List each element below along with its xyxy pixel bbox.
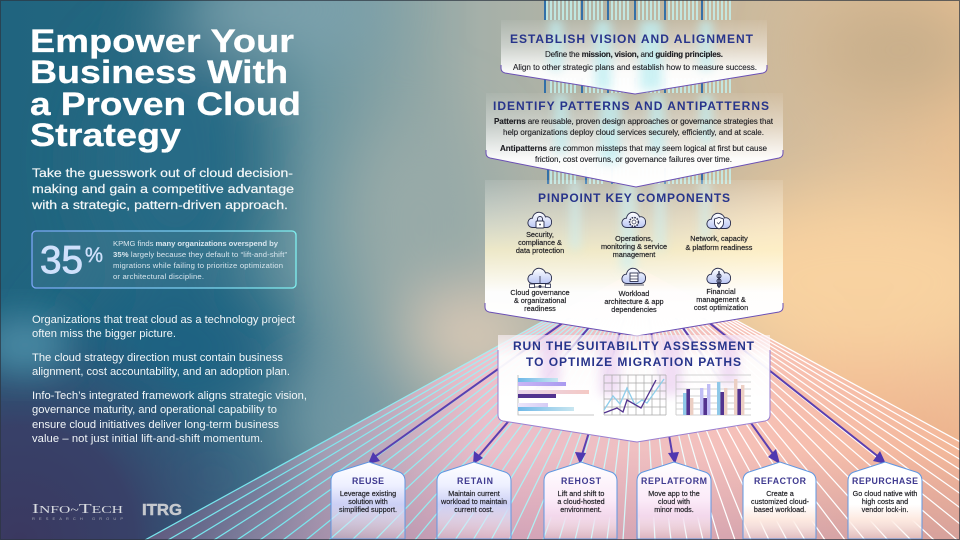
logo: Info-Tech Research Group: RESEARCH GROUP	[32, 516, 123, 521]
label: workload: dependencies	[611, 305, 657, 314]
text: antipatterns definition	[500, 144, 767, 164]
title: Business With	[30, 54, 288, 90]
chart: line chart on grid	[604, 375, 666, 415]
path card: retain: RETAIN	[457, 476, 493, 486]
label: financial	[694, 287, 748, 312]
title: Strategy	[30, 117, 181, 153]
icon: governance cloud	[528, 268, 552, 288]
arrows from assessment step to the six migration paths	[369, 324, 885, 463]
label: operations: Operations,	[615, 234, 653, 243]
label: security: Security,	[526, 230, 554, 239]
step 2: identify patterns and antipatterns	[486, 93, 783, 187]
subtitle: making and gain a competitive advantage	[32, 182, 294, 196]
subtitle: Take the guesswork out of cloud decision-	[32, 166, 293, 180]
path card: refactor	[743, 462, 816, 539]
path card: rehost: a cloud-hosted	[557, 497, 605, 506]
path card: rehost: Lift and shift to	[558, 489, 604, 498]
label: network: Network, capacity	[690, 234, 748, 243]
label: workload: architecture & app	[604, 297, 664, 306]
chart: horizontal bars	[518, 375, 594, 415]
label: network: & platform readiness	[686, 243, 753, 252]
label: governance	[510, 288, 570, 313]
big number: 35	[40, 239, 83, 282]
path card: retain: workload to maintain	[440, 497, 507, 506]
title: a Proven Cloud	[30, 86, 301, 122]
callout text: KPMG finds many organizations overspend by	[113, 239, 279, 248]
path card: repurchase: high costs and	[862, 497, 908, 506]
heading: suitability assessment: TO OPTIMIZE MIGRATION PATHS	[526, 355, 741, 369]
paragraph: technology project: Organizations that treat cloud as a technology project	[32, 314, 296, 326]
label: operations	[601, 234, 667, 259]
step 3: pinpoint key components	[485, 180, 783, 336]
text: patterns definition: help organizations deploy cloud services securely, efficiently, and at scale.	[503, 128, 764, 137]
paragraph: integrated framework	[32, 390, 307, 445]
step 4: run the suitability assessment	[498, 335, 770, 442]
path card: retain	[437, 462, 511, 539]
path card: repurchase	[848, 462, 922, 539]
path card: repurchase: REPURCHASE	[852, 476, 918, 486]
text: vision body	[513, 50, 757, 72]
callout text	[113, 239, 287, 281]
path card: replatform: REPLATFORM	[641, 476, 707, 486]
heading: establish vision: ESTABLISH VISION AND ALIGNMENT	[510, 32, 754, 46]
label: operations: management	[613, 250, 655, 259]
path card: rehost: environment.	[560, 505, 602, 514]
paragraph: strategy direction: alignment, cost accountability, and an adoption plan.	[32, 366, 290, 378]
logo: Info-Tech Research Group	[32, 502, 124, 521]
label: security: data protection	[516, 246, 564, 255]
heading: identify patterns: IDENTIFY PATTERNS AND ANTIPATTERNS	[493, 99, 769, 113]
paragraph: integrated framework: ensure cloud initiatives deliver long-term business	[32, 419, 279, 431]
icon: financial cloud	[707, 268, 731, 288]
heading: suitability assessment: RUN THE SUITABILITY ASSESSMENT	[513, 339, 755, 353]
path card: reuse: REUSE	[352, 476, 384, 486]
path card: rehost	[544, 462, 617, 539]
label: governance: readiness	[524, 304, 556, 313]
vertical light stripes above and between the stacked steps	[545, 0, 730, 184]
paragraph: integrated framework: Info-Tech’s integrated framework aligns strategic vision,	[32, 390, 307, 402]
path card: refactor: based workload.	[754, 505, 806, 514]
label: workload: Workload	[619, 289, 649, 298]
text: patterns definition	[494, 117, 774, 137]
title: Empower Your	[30, 23, 294, 59]
icon: security cloud	[528, 212, 552, 228]
path card: refactor: REFACTOR	[754, 476, 807, 486]
path card: reuse: Leverage existing	[340, 489, 396, 498]
label: financial: Financial	[706, 287, 736, 296]
path card: reuse: simplified support.	[339, 505, 397, 514]
callout text: 35% largely because they default to “lift-and-shift”	[113, 250, 287, 259]
paragraph: strategy direction	[32, 352, 290, 378]
paragraph: technology project	[32, 314, 296, 340]
paragraph: integrated framework: governance maturity, and operational capability to	[32, 404, 277, 416]
big number: %	[85, 244, 103, 267]
path card: retain: current cost.	[454, 505, 494, 514]
label: security	[516, 230, 564, 255]
text: antipatterns definition: Antipatterns are common missteps that may seem logical at first but cause	[500, 144, 767, 153]
fan panel behind the rays	[145, 268, 960, 540]
path card: replatform	[637, 462, 711, 539]
label: governance: Cloud governance	[510, 288, 570, 297]
path card: retain: Maintain current	[448, 489, 500, 498]
chart: grouped columns	[676, 375, 751, 415]
path card: refactor: Create a	[766, 489, 794, 498]
path card: replatform: minor mods.	[654, 505, 694, 514]
logo: Info-Tech Research Group: INFO~ T ECH	[32, 502, 124, 517]
subtitle	[31, 166, 294, 212]
heading: pinpoint key components: PINPOINT KEY COMPONENTS	[538, 191, 730, 205]
label: financial: management &	[696, 295, 746, 304]
icon: network cloud	[707, 213, 731, 229]
fan of light rays	[144, 320, 960, 540]
text: vision body: Define the mission, vision, and guiding principles.	[545, 50, 723, 59]
callout: 35 percent statistic	[32, 231, 296, 288]
callout text: or architectural discipline.	[113, 272, 204, 281]
path card: replatform: cloud with	[658, 497, 690, 506]
paragraph: integrated framework: value – not just initial lift-and-shift momentum.	[32, 433, 263, 445]
paragraph: technology project: often miss the bigger picture.	[32, 328, 176, 340]
callout text: migrations while failing to prioritize optimization	[113, 261, 283, 270]
paragraph: strategy direction: The cloud strategy direction must contain business	[32, 352, 283, 364]
path card: refactor: customized cloud-	[751, 497, 810, 506]
path card: repurchase: vendor lock-in.	[862, 505, 908, 514]
label: network	[686, 234, 753, 252]
label: operations: monitoring & service	[601, 242, 667, 251]
subtitle: with a strategic, pattern-driven approach.	[31, 198, 288, 212]
big number	[40, 239, 103, 282]
text: vision body: Align to other strategic plans and establish how to measure success.	[513, 63, 757, 72]
heading: suitability assessment	[513, 339, 755, 369]
label: security: compliance &	[518, 238, 562, 247]
label: financial: cost optimization	[694, 303, 748, 312]
path card: rehost: REHOST	[561, 476, 602, 486]
logo: ITRG: ITRG	[142, 502, 182, 519]
label: governance: & organizational	[514, 296, 567, 305]
path card: reuse	[331, 462, 405, 539]
step 1: establish vision and alignment	[501, 20, 767, 94]
icon: operations cloud	[622, 212, 646, 228]
text: patterns definition: Patterns are reusable, proven design approaches or governance strategies that	[494, 117, 774, 126]
path card: replatform: Move app to the	[648, 489, 700, 498]
label: workload	[604, 289, 664, 314]
path card: repurchase: Go cloud native with	[853, 489, 917, 498]
icon: workload cloud	[622, 268, 646, 285]
path card: reuse: solution with	[348, 497, 388, 506]
title	[30, 23, 301, 153]
text: antipatterns definition: friction, cost overruns, or governance failures over time.	[535, 155, 732, 164]
